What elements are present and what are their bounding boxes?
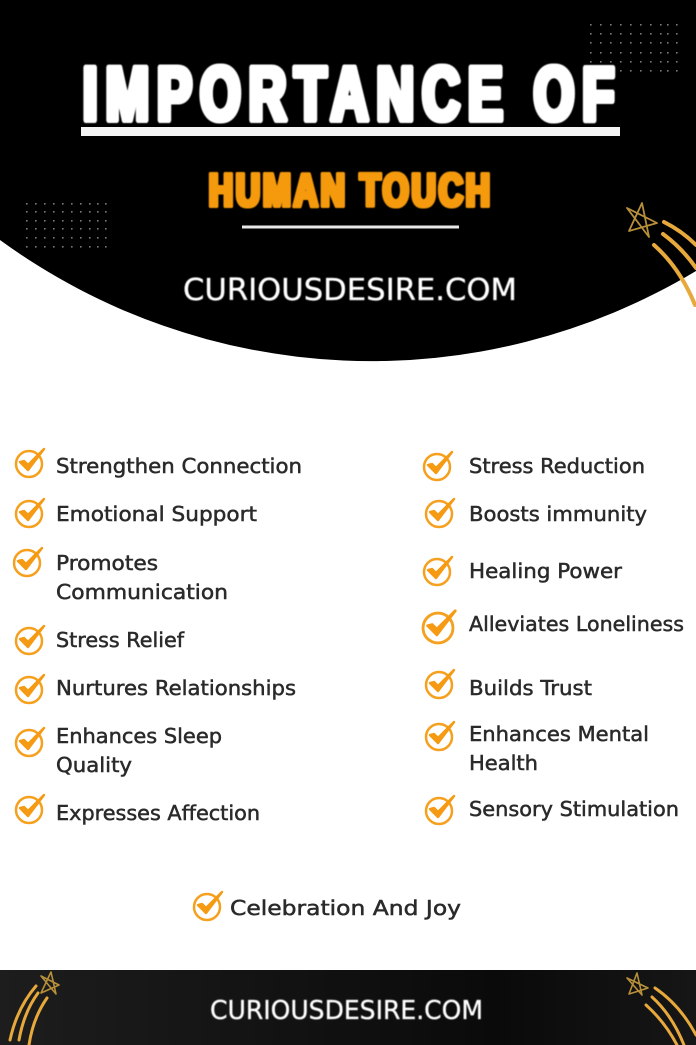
item: promotes communication — [14, 548, 228, 604]
header panel: black curved shape — [0, 0, 696, 361]
decorative dots: top right — [590, 24, 678, 72]
item: expresses affection: Expresses Affection — [56, 801, 260, 825]
header website text: CURIOUSDESIRE.COM — [183, 273, 517, 308]
item: celebration and joy — [194, 892, 461, 920]
item: enhances mental health: Enhances Mental — [469, 722, 649, 746]
item: alleviates loneliness — [423, 611, 684, 643]
icon: shooting star, header — [627, 203, 696, 305]
item: enhances sleep quality: Quality — [56, 753, 132, 777]
item: builds trust — [426, 670, 592, 700]
item: strengthen connection: Strengthen Connection — [56, 454, 302, 478]
item: boosts immunity: Boosts immunity — [469, 502, 647, 526]
item: nurtures relationships: Nurtures Relationships — [56, 676, 296, 700]
footer panel — [0, 970, 696, 1045]
footer website text: CURIOUSDESIRE.COM — [210, 996, 483, 1026]
item: healing power: Healing Power — [469, 559, 623, 583]
item: stress reduction — [424, 452, 645, 480]
subtitle: human touch: HUMAN TOUCH — [209, 166, 490, 216]
item: stress relief: Stress Relief — [56, 628, 185, 652]
item: enhances sleep quality — [16, 724, 222, 777]
item: stress relief — [16, 626, 185, 654]
item: expresses affection — [16, 795, 260, 825]
item: stress reduction: Stress Reduction — [469, 454, 645, 478]
left checklist — [14, 449, 302, 825]
item: strengthen connection — [16, 449, 302, 478]
item: sensory stimulation: Sensory Stimulation — [469, 797, 679, 821]
right checklist — [423, 452, 684, 824]
item: alleviates loneliness: Alleviates Loneliness — [469, 612, 684, 636]
item: boosts immunity — [426, 499, 647, 527]
icon: shooting star, footer left — [10, 972, 59, 1045]
item: healing power — [424, 557, 623, 585]
decorative dots: left — [26, 203, 107, 248]
item: emotional support: Emotional Support — [56, 502, 257, 526]
title: importance of: IMPORTANCE OF — [83, 51, 614, 136]
item: emotional support — [16, 499, 257, 527]
title underline — [81, 127, 620, 136]
item: celebration and joy: Celebration And Joy — [230, 896, 461, 920]
item: enhances mental health: Health — [469, 751, 538, 775]
item: sensory stimulation — [426, 796, 679, 824]
item: enhances sleep quality: Enhances Sleep — [56, 724, 222, 748]
item: builds trust: Builds Trust — [469, 676, 592, 700]
subtitle divider — [242, 226, 459, 228]
icon: shooting star, footer right — [627, 973, 696, 1045]
item: promotes communication: Promotes — [56, 551, 158, 575]
item: nurtures relationships — [16, 675, 296, 703]
item: promotes communication: Communication — [56, 580, 228, 604]
item: enhances mental health — [426, 722, 649, 775]
